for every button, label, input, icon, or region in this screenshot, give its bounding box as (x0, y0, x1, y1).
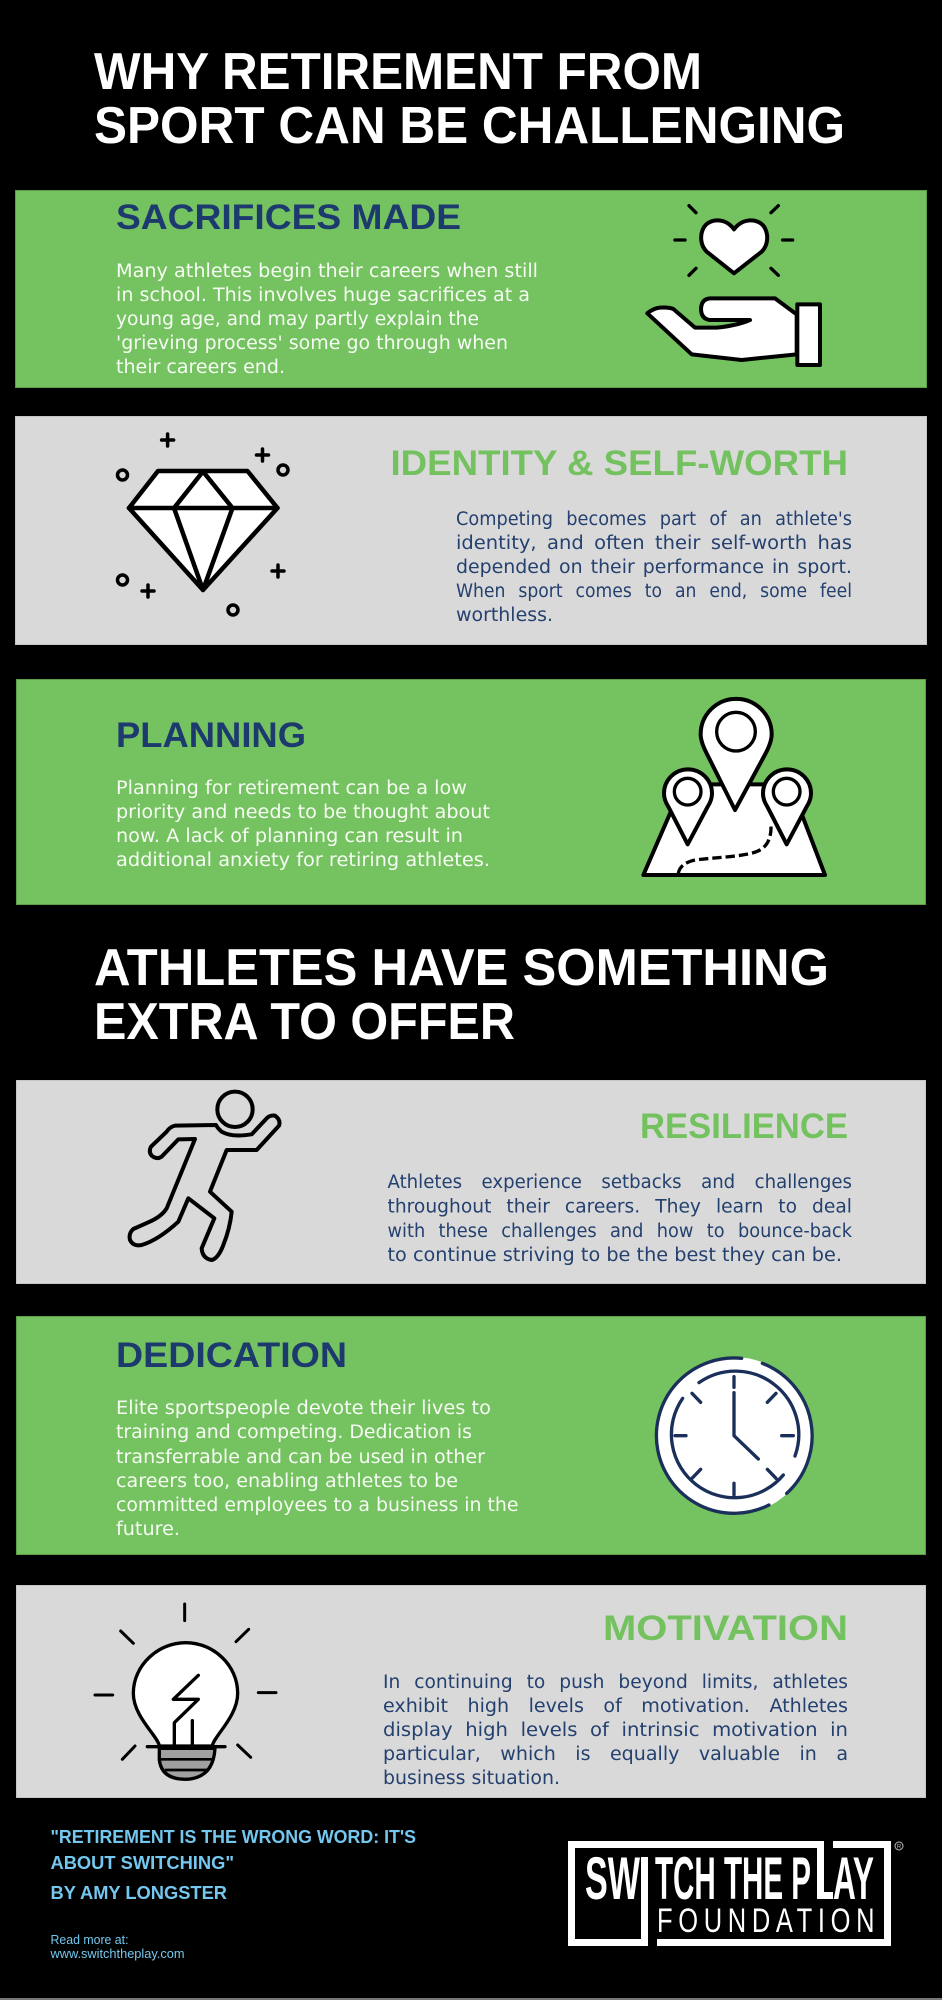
text block: motivation: business situation. (383, 1768, 560, 1789)
title: SPORT CAN BE CHALLENGING (94, 97, 845, 155)
callout: quote and byline: "RETIREMENT IS THE WRONG WORD: IT'S (50, 1827, 416, 1847)
text block: motivation (383, 1672, 848, 1789)
heading: resilience: RESILIENCE (640, 1107, 848, 1146)
title (94, 43, 845, 155)
logo: switch the play foundation (572, 1842, 903, 1942)
panel: resilience (16, 1080, 926, 1284)
text block: identity and self-worth: Competing becomes part of an athlete's (456, 509, 852, 530)
heading: dedication: DEDICATION (116, 1336, 347, 1375)
logo: switch the play foundation: SW (585, 1845, 640, 1912)
text block: sacrifices made: Many athletes begin their careers when still (116, 261, 538, 282)
icon: running athlete (130, 1092, 279, 1260)
title: WHY RETIREMENT FROM (94, 43, 702, 101)
text block: resilience: to continue striving to be the best they can be. (388, 1245, 842, 1266)
text block: resilience: Athletes experience setbacks and challenges (388, 1172, 852, 1193)
text block: sacrifices made: young age, and may partly explain the (116, 309, 479, 330)
heading: athletes have something extra (94, 939, 829, 1051)
text block: read more link: www.switchtheplay.com (49, 1947, 185, 1961)
text block: resilience: with these challenges and how to bounce-back (388, 1221, 852, 1242)
text block: resilience (388, 1172, 852, 1266)
logo: switch the play foundation: FOUNDATION (657, 1903, 874, 1940)
icon: heart in hand (647, 206, 820, 365)
icon: map with pins (643, 699, 825, 875)
heading: identity and self-worth: IDENTITY & SELF-WORTH (390, 444, 848, 483)
text block: planning: priority and needs to be thought about (116, 802, 490, 823)
text block: sacrifices made (116, 261, 538, 378)
heading: sacrifices made: SACRIFICES MADE (116, 198, 461, 237)
text block: dedication: careers too, enabling athletes to be (116, 1471, 458, 1492)
text block: read more link (49, 1933, 185, 1961)
text block: identity and self-worth (456, 509, 852, 626)
text block: dedication: committed employees to a business in the (116, 1495, 518, 1516)
text block: motivation: particular, which is equally valuable in a (383, 1744, 848, 1765)
text block: identity and self-worth: worthless. (456, 605, 553, 626)
text block: identity and self-worth: depended on their performance in sport. (456, 557, 852, 578)
text block: motivation: display high levels of intrinsic motivation in (383, 1720, 848, 1741)
callout: quote and byline: BY AMY LONGSTER (50, 1883, 227, 1903)
logo: switch the play foundation: R (897, 1844, 902, 1850)
panel: planning (16, 680, 926, 904)
text block: sacrifices made: their careers end. (116, 357, 285, 378)
panel: motivation (16, 1586, 926, 1798)
text block: sacrifices made: in school. This involves huge sacrifices at a (116, 285, 530, 306)
text block: planning: Planning for retirement can be a low (116, 778, 467, 799)
icon: diamond (118, 434, 288, 615)
panel: sacrifices made (16, 190, 926, 388)
heading: athletes have something extra: ATHLETES HAVE SOMETHING (94, 939, 829, 997)
logo: switch the play foundation: AY (833, 1845, 874, 1912)
text block: dedication: future. (116, 1519, 180, 1540)
text block: motivation: exhibit high levels of motivation. Athletes (383, 1696, 848, 1717)
text block: planning: additional anxiety for retiring athletes. (116, 850, 490, 871)
panel: identity and self-worth (16, 416, 926, 644)
text block: dedication: transferrable and can be used in other (116, 1447, 485, 1468)
text block: dedication (116, 1398, 518, 1540)
icon: light bulb (95, 1604, 276, 1779)
heading: motivation: MOTIVATION (603, 1609, 848, 1648)
text block: read more link: Read more at: (50, 1933, 128, 1947)
text block: motivation: In continuing to push beyond limits, athletes (383, 1672, 848, 1693)
text block: resilience: throughout their careers. They learn to deal (388, 1196, 852, 1218)
text block: sacrifices made: 'grieving process' some go through when (116, 333, 508, 354)
text block: dedication: Elite sportspeople devote their lives to (116, 1398, 491, 1419)
text block: planning (116, 778, 490, 871)
callout: quote and byline: ABOUT SWITCHING" (50, 1853, 234, 1873)
panel: dedication (16, 1316, 926, 1554)
text block: dedication: training and competing. Dedication is (116, 1422, 472, 1443)
heading: athletes have something extra: EXTRA TO OFFER (94, 993, 515, 1051)
icon: clock (655, 1357, 813, 1514)
text block: planning: now. A lack of planning can result in (116, 826, 463, 847)
text block: identity and self-worth: When sport comes to an end, some feel (456, 581, 852, 602)
text block: identity and self-worth: identity, and often their self-worth has (456, 533, 852, 554)
heading: planning: PLANNING (116, 716, 306, 755)
callout: quote and byline (50, 1827, 416, 1903)
